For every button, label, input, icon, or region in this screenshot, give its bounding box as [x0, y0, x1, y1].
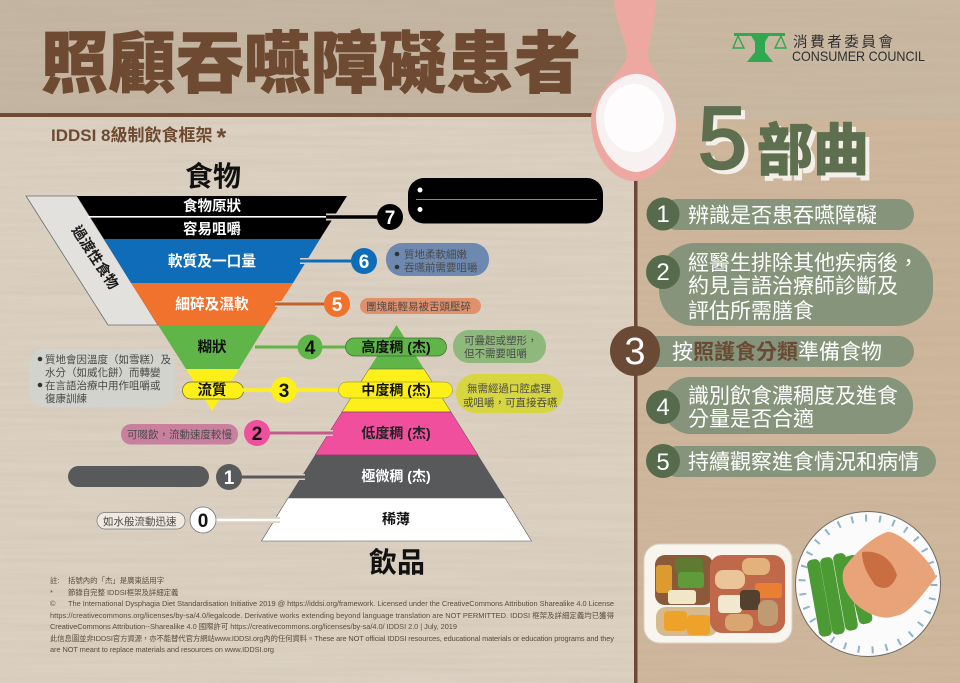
footnotes: CreativeCommons Attribution--Sharealike 4.0 國際許可 https://creativecommons.org/licenses/by-sa/4.0/ IDDSI 2.0 | July, 2019	[50, 622, 457, 631]
connector line 5	[275, 302, 330, 306]
level 5 minced and moist	[131, 283, 293, 325]
badge 1: 1	[224, 468, 235, 489]
callout 0	[97, 512, 185, 529]
callout 1	[68, 466, 209, 487]
callout 7	[408, 178, 603, 224]
heading shadow: 5	[702, 92, 751, 191]
callout 2	[121, 424, 238, 444]
connector line 0	[208, 519, 280, 521]
level 6 soft and bite-sized: 軟質及一口量	[168, 252, 256, 270]
connector 2	[262, 430, 333, 436]
connector 7	[326, 214, 385, 220]
connector line 1	[234, 476, 305, 478]
level 0 thin	[262, 498, 532, 541]
step 2: 評估所需膳食	[688, 300, 814, 323]
level 7 food: 食物原狀	[183, 197, 241, 215]
footnotes: 括號內的「杰」是廣東話用字	[68, 576, 164, 585]
step 1	[646, 198, 914, 230]
badge 2	[244, 420, 270, 446]
chart: drinks pyramid	[262, 325, 532, 541]
footnotes: The International Dysphagia Diet Standardisation Initiative 2019 @ https://iddsi.org/framework. Licensed under the CreativeCommons Attribution Sharealike 4.0 License	[68, 599, 614, 608]
badge 5	[324, 291, 350, 317]
label: slightly thick: 極微稠 (杰)	[361, 468, 431, 484]
level 4 pureed: 糊狀	[198, 338, 227, 356]
footnotes: 註:	[50, 576, 59, 585]
callout 4: 但不需要咀嚼	[464, 347, 527, 360]
step 4: 4	[656, 394, 670, 421]
heading main	[698, 88, 869, 187]
heading main: 5	[698, 88, 747, 187]
heading main: 部曲	[757, 119, 869, 182]
footnotes	[50, 576, 615, 654]
level 4 extremely thick	[369, 325, 424, 369]
step 4: 識別飲食濃稠度及進食	[688, 385, 898, 408]
callout: transitional foods notes	[30, 349, 175, 407]
footnotes: *	[50, 588, 53, 597]
footnotes: ©	[50, 599, 56, 608]
logo English name: CONSUMER COUNCIL	[792, 48, 925, 64]
callout 0: 如水般流動迅速	[103, 515, 177, 528]
callout 3	[456, 374, 563, 413]
connector line 6	[300, 260, 360, 262]
connector line 2	[262, 432, 333, 434]
label: extremely thick: 高度稠 (杰)	[361, 339, 431, 355]
step 2: 2	[656, 259, 670, 286]
level 5 minced and moist: 細碎及濕軟	[175, 295, 249, 313]
connector 4	[255, 346, 346, 348]
badge 4	[298, 334, 322, 360]
heading: drinks: 飲品	[369, 547, 425, 578]
step 5	[646, 444, 936, 478]
callout 5	[360, 298, 481, 314]
icon: scales	[733, 33, 786, 62]
step 1: 1	[656, 201, 670, 228]
step 2: 約見言語治療師診斷及	[688, 275, 898, 298]
footnotes: are NOT meant to replace materials and resources on www.IDDSI.org	[50, 645, 274, 654]
transitional foods label: 過渡性食物	[68, 222, 122, 293]
callout 3: 無需經過口腔處理	[467, 382, 551, 395]
level 1 slightly thick	[288, 455, 505, 498]
step 3: 按照護食分類準備食物	[672, 340, 882, 364]
heading: 5 steps	[698, 88, 873, 191]
connector line 7	[326, 215, 385, 219]
level 6 soft and bite-sized	[104, 239, 320, 283]
title: 照顧吞嚥障礙患者	[41, 27, 581, 102]
label: moderately thick: 中度稠 (杰)	[361, 382, 431, 398]
badge 1	[216, 464, 242, 490]
callout 2: 可啜飲，流動速度較慢	[127, 428, 232, 441]
badge 3: 3	[279, 381, 289, 402]
spoon with puree	[591, 0, 678, 181]
connector 3	[243, 388, 339, 392]
badge 7: 7	[385, 208, 395, 229]
plate of food photo	[796, 512, 940, 656]
callout 6: 質地柔軟細嫩	[404, 248, 467, 261]
level 2 mildly thick	[315, 412, 478, 455]
badge 2: 2	[252, 424, 262, 445]
chart: inverted food pyramid	[77, 196, 347, 411]
level 3 liquidised: 流質	[198, 381, 226, 399]
header rule	[0, 113, 592, 117]
level 3 moderately thick	[342, 369, 451, 412]
heading: IDDSI framework: *	[217, 124, 227, 152]
heading: food: 食物	[185, 161, 241, 192]
badge 4: 4	[305, 338, 316, 359]
heading shadow: 部曲	[761, 124, 873, 187]
step 4: 分量是否合適	[688, 408, 814, 431]
step 2	[646, 243, 933, 326]
callout: transitional foods notes: 復康訓練	[45, 392, 87, 405]
badge 0	[190, 507, 216, 533]
heading shadow	[702, 92, 873, 191]
step 2: 經醫生排除其他疾病後，	[688, 252, 919, 275]
footnotes: https://creativecommons.org/licenses/by-sa/4.0/legalcode. Derivative works extending beyond language translation are NOT PERMITTED. IDDSI 框架及詳細定義均已獲得	[50, 611, 615, 620]
label: moderately thick	[338, 382, 452, 398]
callout 3: 或咀嚼，可直接吞嚥	[463, 396, 558, 409]
level 7 food	[77, 196, 347, 239]
connector 6	[300, 258, 360, 264]
panel: transitional foods	[26, 196, 158, 325]
callout: transitional foods notes: 水分（如威化餅）而轉變	[45, 366, 161, 379]
level 3 liquidised	[182, 369, 244, 411]
badge 6: 6	[359, 252, 369, 273]
badge 7	[377, 204, 403, 230]
callout 6: 吞嚥前需要咀嚼	[404, 261, 478, 274]
connector 5	[275, 301, 330, 307]
badge 5: 5	[332, 295, 343, 316]
food tray photo	[644, 544, 792, 643]
callout 6	[386, 243, 489, 276]
callout: transitional foods notes: 在言語治療中用作咀嚼或	[45, 379, 161, 392]
step 3	[610, 326, 914, 376]
heading: IDDSI framework: IDDSI 8級制飲食框架	[51, 126, 213, 145]
callout 5: 團塊能輕易被舌頭壓碎	[366, 300, 471, 313]
callout: transitional foods notes: 質地會因溫度（如雪糕）及	[45, 353, 171, 366]
connector 1	[234, 474, 305, 480]
badge 3	[271, 377, 297, 403]
step 3: 3	[624, 331, 646, 373]
callout 4: 可疊起或塑形，	[464, 335, 538, 347]
step 5: 5	[656, 449, 670, 476]
column divider	[634, 178, 638, 683]
step 4	[646, 377, 913, 434]
label: extremely thick	[346, 338, 446, 356]
logo: Consumer Council	[733, 33, 925, 64]
badge 6	[351, 248, 377, 274]
step 1: 辨識是否患吞嚥障礙	[688, 204, 877, 228]
connector 0	[208, 517, 280, 523]
label: thin: 稀薄	[382, 511, 410, 527]
callout 4	[453, 330, 546, 363]
logo Chinese name: 消費者委員會	[793, 34, 894, 51]
footnotes: 此信息圖並非IDDSI官方資源，亦不能替代官方網站www.IDDSI.org內的任何資料。These are NOT official IDDSI resources, educational materials or education programs and they	[50, 634, 614, 643]
step 5: 持續觀察進食情況和病情	[688, 451, 919, 474]
level 4 pureed	[158, 325, 266, 369]
badge 0: 0	[198, 511, 208, 532]
level 7 food: 容易咀嚼	[183, 220, 241, 238]
footnotes: 節錄自完整 IDDSI框架及詳細定義	[68, 588, 179, 597]
label: mildly thick: 低度稠 (杰)	[361, 425, 431, 441]
